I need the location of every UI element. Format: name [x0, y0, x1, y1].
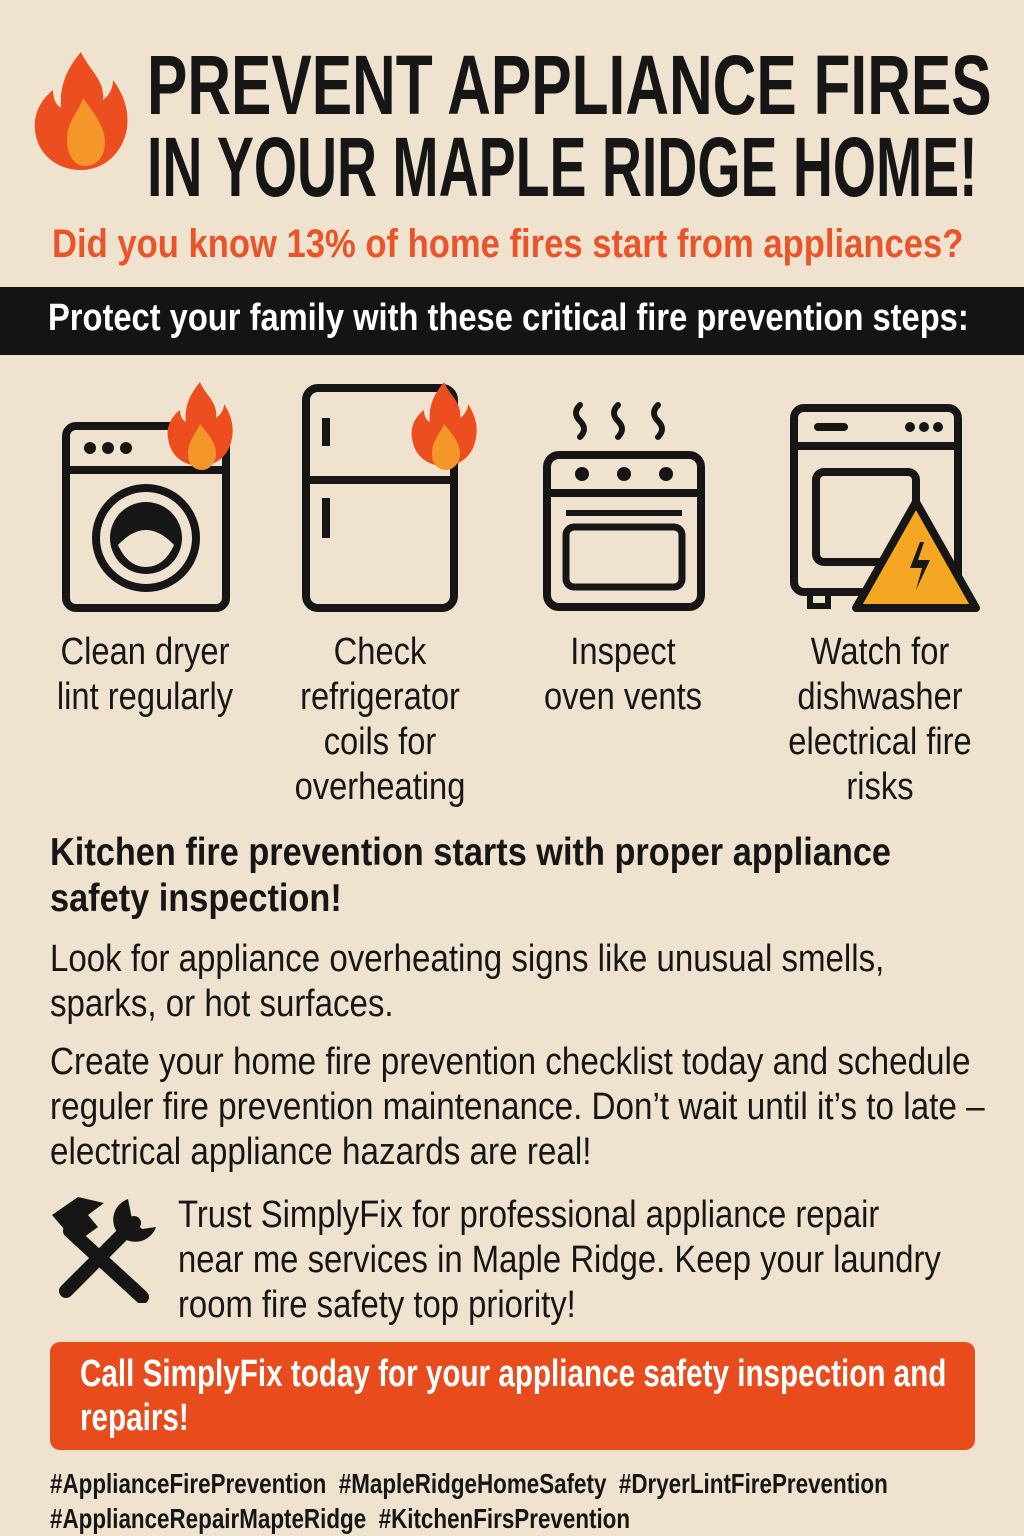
paragraph: trust simplyfix: [178, 1194, 941, 1326]
label: refrigerator: overheating: [295, 766, 465, 808]
icon: tools: [52, 1197, 156, 1303]
paragraph: checklist: [50, 1041, 985, 1173]
paragraph: trust simplyfix: room fire safety top priority!: [178, 1284, 576, 1326]
icon: refrigerator: [302, 382, 477, 612]
paragraph: trust simplyfix: near me services in Maple Ridge. Keep your laundry: [178, 1239, 941, 1281]
hashtags: [50, 1468, 888, 1534]
paragraph: signs: Look for appliance overheating signs like unusual smells,: [50, 938, 884, 980]
paragraph: trust simplyfix: Trust SimplyFix for professional appliance repair: [178, 1194, 879, 1236]
label: refrigerator: Check: [334, 631, 426, 673]
label: oven: Inspect: [570, 631, 676, 673]
hashtags: #ApplianceFirePrevention #MapleRidgeHomeSafety #DryerLintFirePrevention: [50, 1468, 888, 1499]
heading: safety inspection!: [50, 877, 342, 920]
black banner: Protect your family with these critical fire prevention steps:: [48, 297, 969, 339]
paragraph: signs: [50, 938, 884, 1025]
paragraph: checklist: Create your home fire prevention checklist today and schedule: [50, 1041, 970, 1083]
label: oven: [544, 631, 702, 718]
paragraph: signs: sparks, or hot surfaces.: [50, 983, 394, 1025]
label: dishwasher: electrical fire: [788, 721, 972, 763]
label: refrigerator: refrigerator: [300, 676, 460, 718]
title: [147, 38, 992, 214]
label: dryer: lint regularly: [57, 676, 233, 718]
label: dishwasher: [788, 631, 972, 808]
call to action button: Call SimplyFix today for your appliance safety inspection and: [80, 1353, 946, 1395]
heading: Kitchen fire prevention starts with proper appliance: [50, 831, 891, 874]
subtitle: Did you know 13% of home fires start from appliances?: [52, 222, 963, 266]
label: refrigerator: [295, 631, 465, 808]
paragraph: checklist: electrical appliance hazards are real!: [50, 1131, 592, 1173]
paragraph: checklist: reguler fire prevention maintenance. Don’t wait until it’s to late –: [50, 1086, 985, 1128]
hashtags: #ApplianceRepairMapteRidge #KitchenFirsPrevention: [50, 1503, 630, 1534]
black banner: [0, 287, 1024, 355]
icon: fire: [34, 52, 128, 170]
heading: [50, 831, 891, 920]
call to action button: repairs!: [80, 1397, 189, 1439]
label: dryer: Clean dryer: [61, 631, 229, 673]
icon: dishwasher with warning: [790, 404, 980, 612]
label: dishwasher: risks: [846, 766, 914, 808]
icon: oven: [543, 402, 705, 611]
icon: dryer: [62, 382, 233, 612]
label: oven: oven vents: [544, 676, 702, 718]
label: dishwasher: Watch for: [811, 631, 949, 673]
label: dishwasher: dishwasher: [797, 676, 963, 718]
label: dryer: [57, 631, 233, 718]
call to action button: [50, 1342, 975, 1450]
title: PREVENT APPLIANCE FIRES: [147, 38, 992, 132]
label: refrigerator: coils for: [324, 721, 436, 763]
title: IN YOUR MAPLE RIDGE HOME!: [147, 120, 978, 214]
